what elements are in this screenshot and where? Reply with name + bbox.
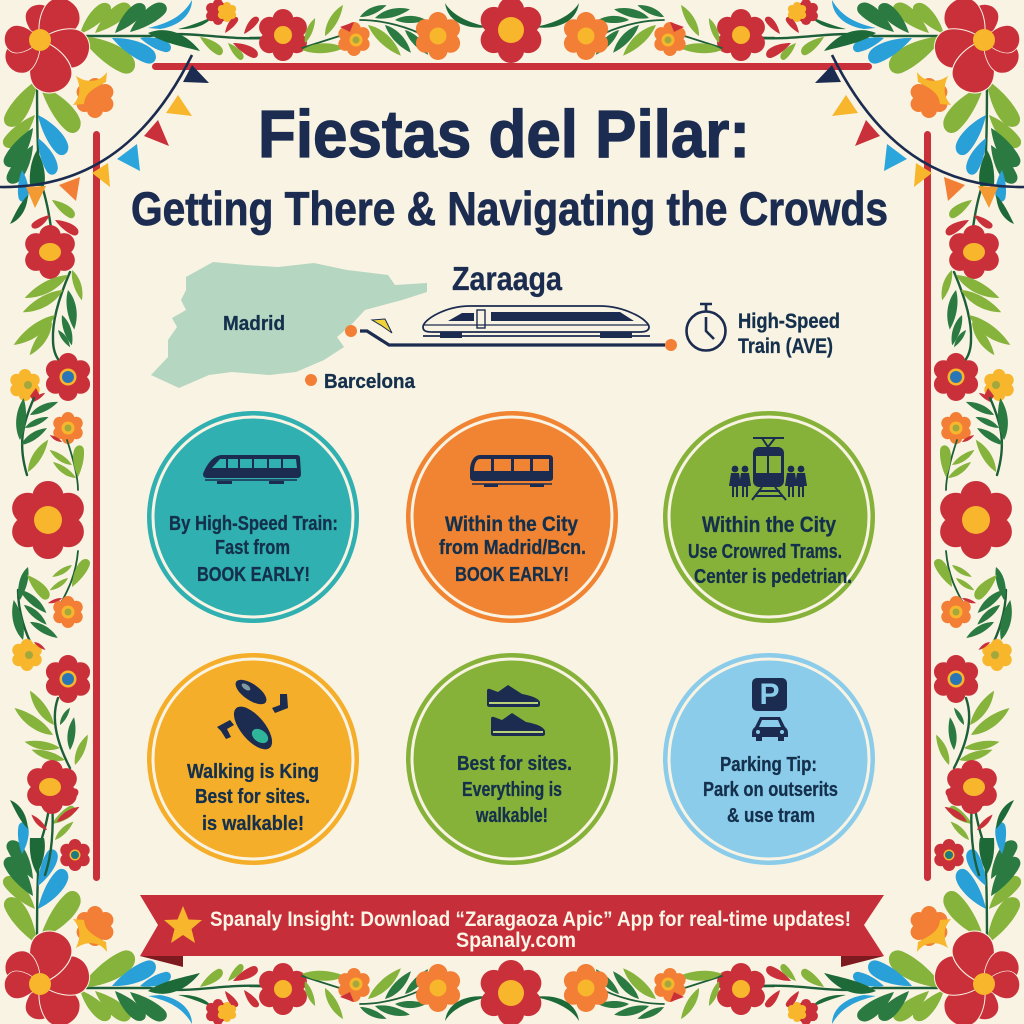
- icon: walking shoes: [217, 675, 288, 756]
- marker: Barcelona: Barcelona: [324, 371, 416, 393]
- route line: [345, 319, 677, 351]
- banner text: Spanaly Insight: Download “Zaragaoza Apic” App for real-time updates!: [210, 908, 851, 931]
- card text: Best for sites.: [457, 753, 572, 775]
- banner text: [210, 908, 851, 952]
- card: walking is king: [147, 653, 359, 865]
- bunting right: [815, 55, 1024, 208]
- card text: By High-Speed Train:: [169, 513, 338, 535]
- card: parking tip: [663, 653, 875, 865]
- floral border: bottom centre flower: [481, 960, 541, 1024]
- card: within the city, bus: [406, 411, 618, 623]
- card text: Parking Tip:: [720, 754, 817, 776]
- title: Getting There & Navigating the Crowds: [131, 182, 888, 235]
- card text: from Madrid/Bcn.: [439, 537, 586, 559]
- floral border: top centre flower: [481, 0, 541, 63]
- card text: & use tram: [727, 805, 815, 827]
- card text: Center is pedetrian.: [694, 566, 852, 588]
- card text: Within the City: [445, 513, 578, 536]
- icon: high-speed train: [423, 306, 650, 338]
- red frame: [93, 63, 931, 881]
- icon: bus: [470, 455, 553, 487]
- card text: BOOK EARLY!: [455, 564, 569, 586]
- label: High-Speed Train (AVE): Train (AVE): [738, 335, 833, 358]
- card text: Fast from: [215, 537, 290, 559]
- map of Spain: [151, 262, 427, 388]
- icon: parking sign: [752, 678, 787, 711]
- icon: tram with people: [729, 438, 807, 500]
- title: [131, 97, 888, 235]
- label: Zaraaga: Zaraaga: [452, 260, 563, 297]
- icon: parking sign: P: [759, 678, 780, 711]
- card text: walkable!: [475, 805, 548, 827]
- floral border: left column: [9, 225, 92, 875]
- floral border: bottom-right corner and bottom row: [534, 787, 1024, 1024]
- bunting left: [0, 55, 209, 208]
- card text: [187, 761, 319, 835]
- card text: Everything is: [462, 779, 562, 801]
- card text: [439, 513, 586, 586]
- icon: stopwatch: [686, 304, 726, 350]
- icon: sneakers: [487, 685, 545, 736]
- floral border: right column: [932, 225, 1015, 875]
- title: Fiestas del Pilar:: [258, 97, 750, 172]
- card text: [169, 513, 338, 586]
- card text: Within the City: [702, 512, 837, 537]
- card text: Best for sites.: [195, 786, 310, 808]
- card text: is walkable!: [202, 813, 304, 835]
- icon: car: [752, 717, 788, 741]
- card: by high-speed train: [147, 411, 359, 623]
- card text: [703, 754, 838, 827]
- card text: Park on outserits: [703, 779, 838, 801]
- card text: Walking is King: [187, 761, 319, 783]
- banner text: Spanaly.com: [456, 929, 576, 952]
- card text: [457, 753, 572, 827]
- icon: star: [164, 906, 202, 943]
- card text: [688, 512, 852, 588]
- card: best for sites: [406, 653, 618, 865]
- label: Madrid: Madrid: [223, 313, 285, 335]
- card text: BOOK EARLY!: [197, 564, 310, 586]
- floral border: top-left corner and top row: [0, 0, 490, 237]
- card: within the city, trams: [663, 411, 875, 623]
- icon: train: [203, 455, 301, 484]
- card text: Use Crowred Trams.: [688, 541, 842, 563]
- floral border: top-right corner and top row: [534, 0, 1024, 237]
- footer banner: [140, 895, 884, 967]
- route map panel: [151, 260, 840, 393]
- label: High-Speed Train (AVE): High-Speed: [738, 310, 840, 333]
- floral border: bottom-left corner and bottom row: [0, 787, 490, 1024]
- label: High-Speed Train (AVE): [738, 310, 840, 358]
